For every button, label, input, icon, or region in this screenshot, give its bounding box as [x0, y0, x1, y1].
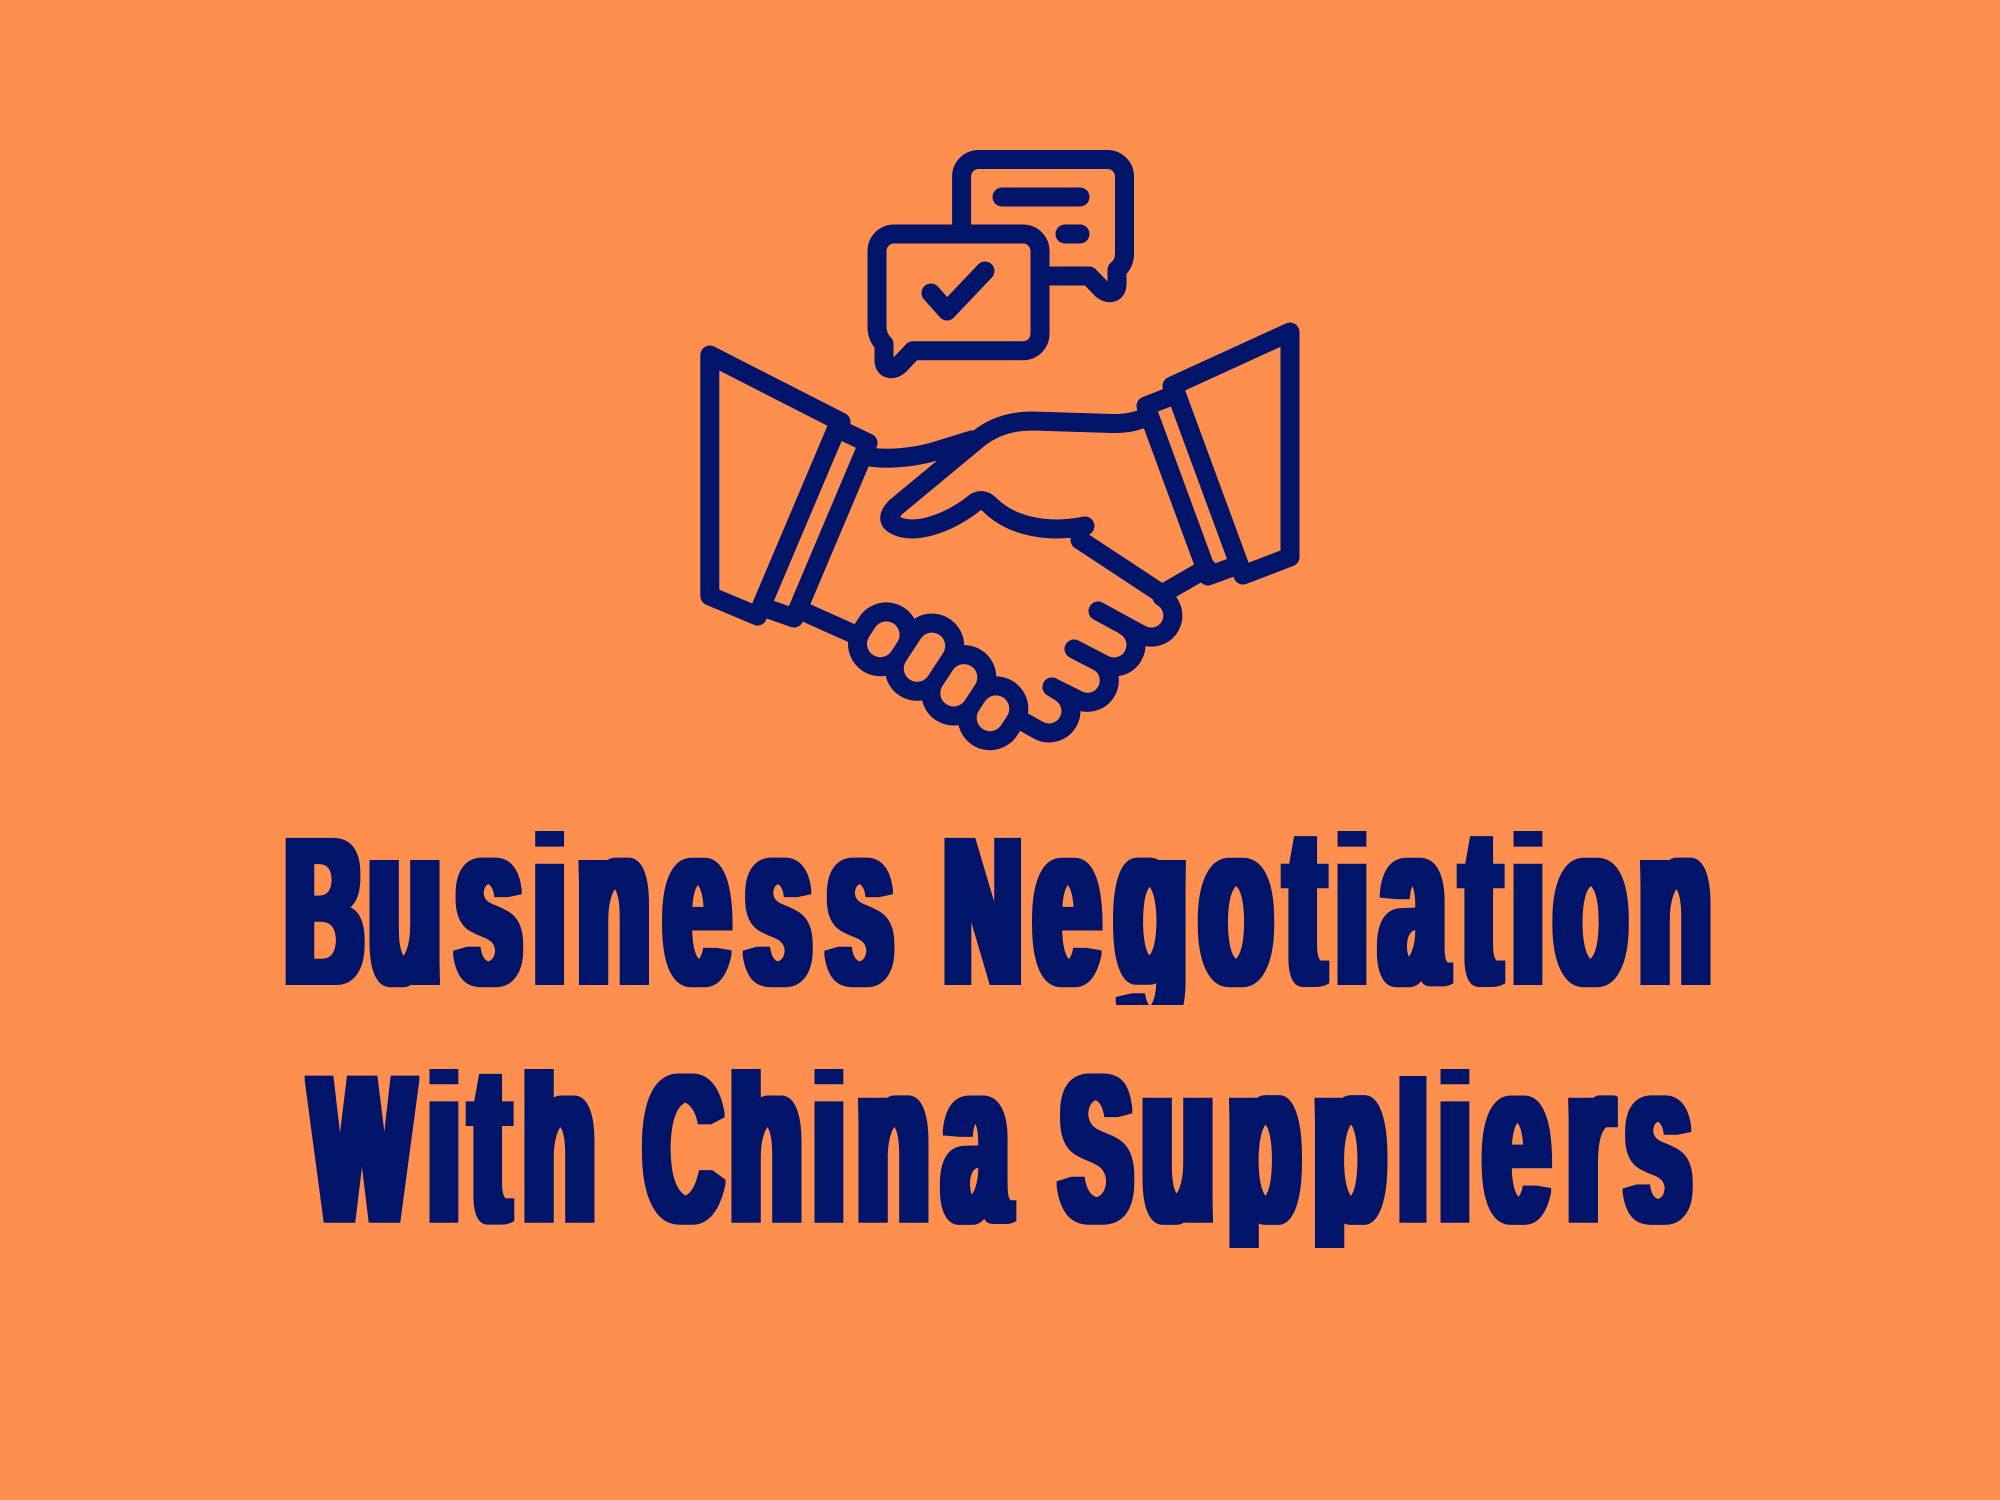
title line 1: ti	[1286, 784, 1368, 1031]
title line 1: ness	[577, 776, 934, 1032]
title line 2: upp	[1142, 1014, 1386, 1270]
icon: handshake with speech bubbles	[710, 160, 1290, 733]
icon: upper arm and thumb outline	[800, 417, 1207, 636]
title line 2: h	[523, 1014, 637, 1270]
title line 1	[286, 831, 1710, 1005]
title line 2	[304, 1069, 1693, 1248]
title line 1: N	[944, 796, 1022, 1028]
title line 1: i	[534, 784, 566, 1031]
title line 1: ego	[1034, 776, 1272, 1032]
title line 2: na	[857, 1014, 1052, 1270]
title line 2: W	[311, 1034, 413, 1266]
title line 1: ti	[1462, 784, 1544, 1031]
title line 2: ers	[1483, 1014, 1691, 1270]
title line 2: i	[1439, 1021, 1471, 1268]
title line 2: it	[428, 1021, 509, 1268]
icon: left shirt cuff	[710, 355, 868, 618]
title line 2: S	[1060, 1034, 1132, 1266]
title line 1: on	[1554, 776, 1711, 1032]
icon: right shirt cuff	[1146, 332, 1290, 576]
title line 2: i	[813, 1021, 845, 1268]
title line 2: h	[730, 1014, 802, 1270]
title line 2: l	[1399, 1044, 1427, 1263]
icon: front speech bubble with check mark	[877, 234, 1040, 369]
title	[286, 831, 1710, 1248]
title line 1: us	[369, 776, 522, 1032]
title line 2: C	[644, 1034, 722, 1266]
icon: left hand fingers	[880, 635, 996, 718]
icon: back speech bubble	[962, 160, 1124, 293]
title line 1: a	[1380, 776, 1447, 1032]
icon: right hand fingers	[1015, 597, 1173, 733]
title line 1: B	[285, 796, 363, 1028]
